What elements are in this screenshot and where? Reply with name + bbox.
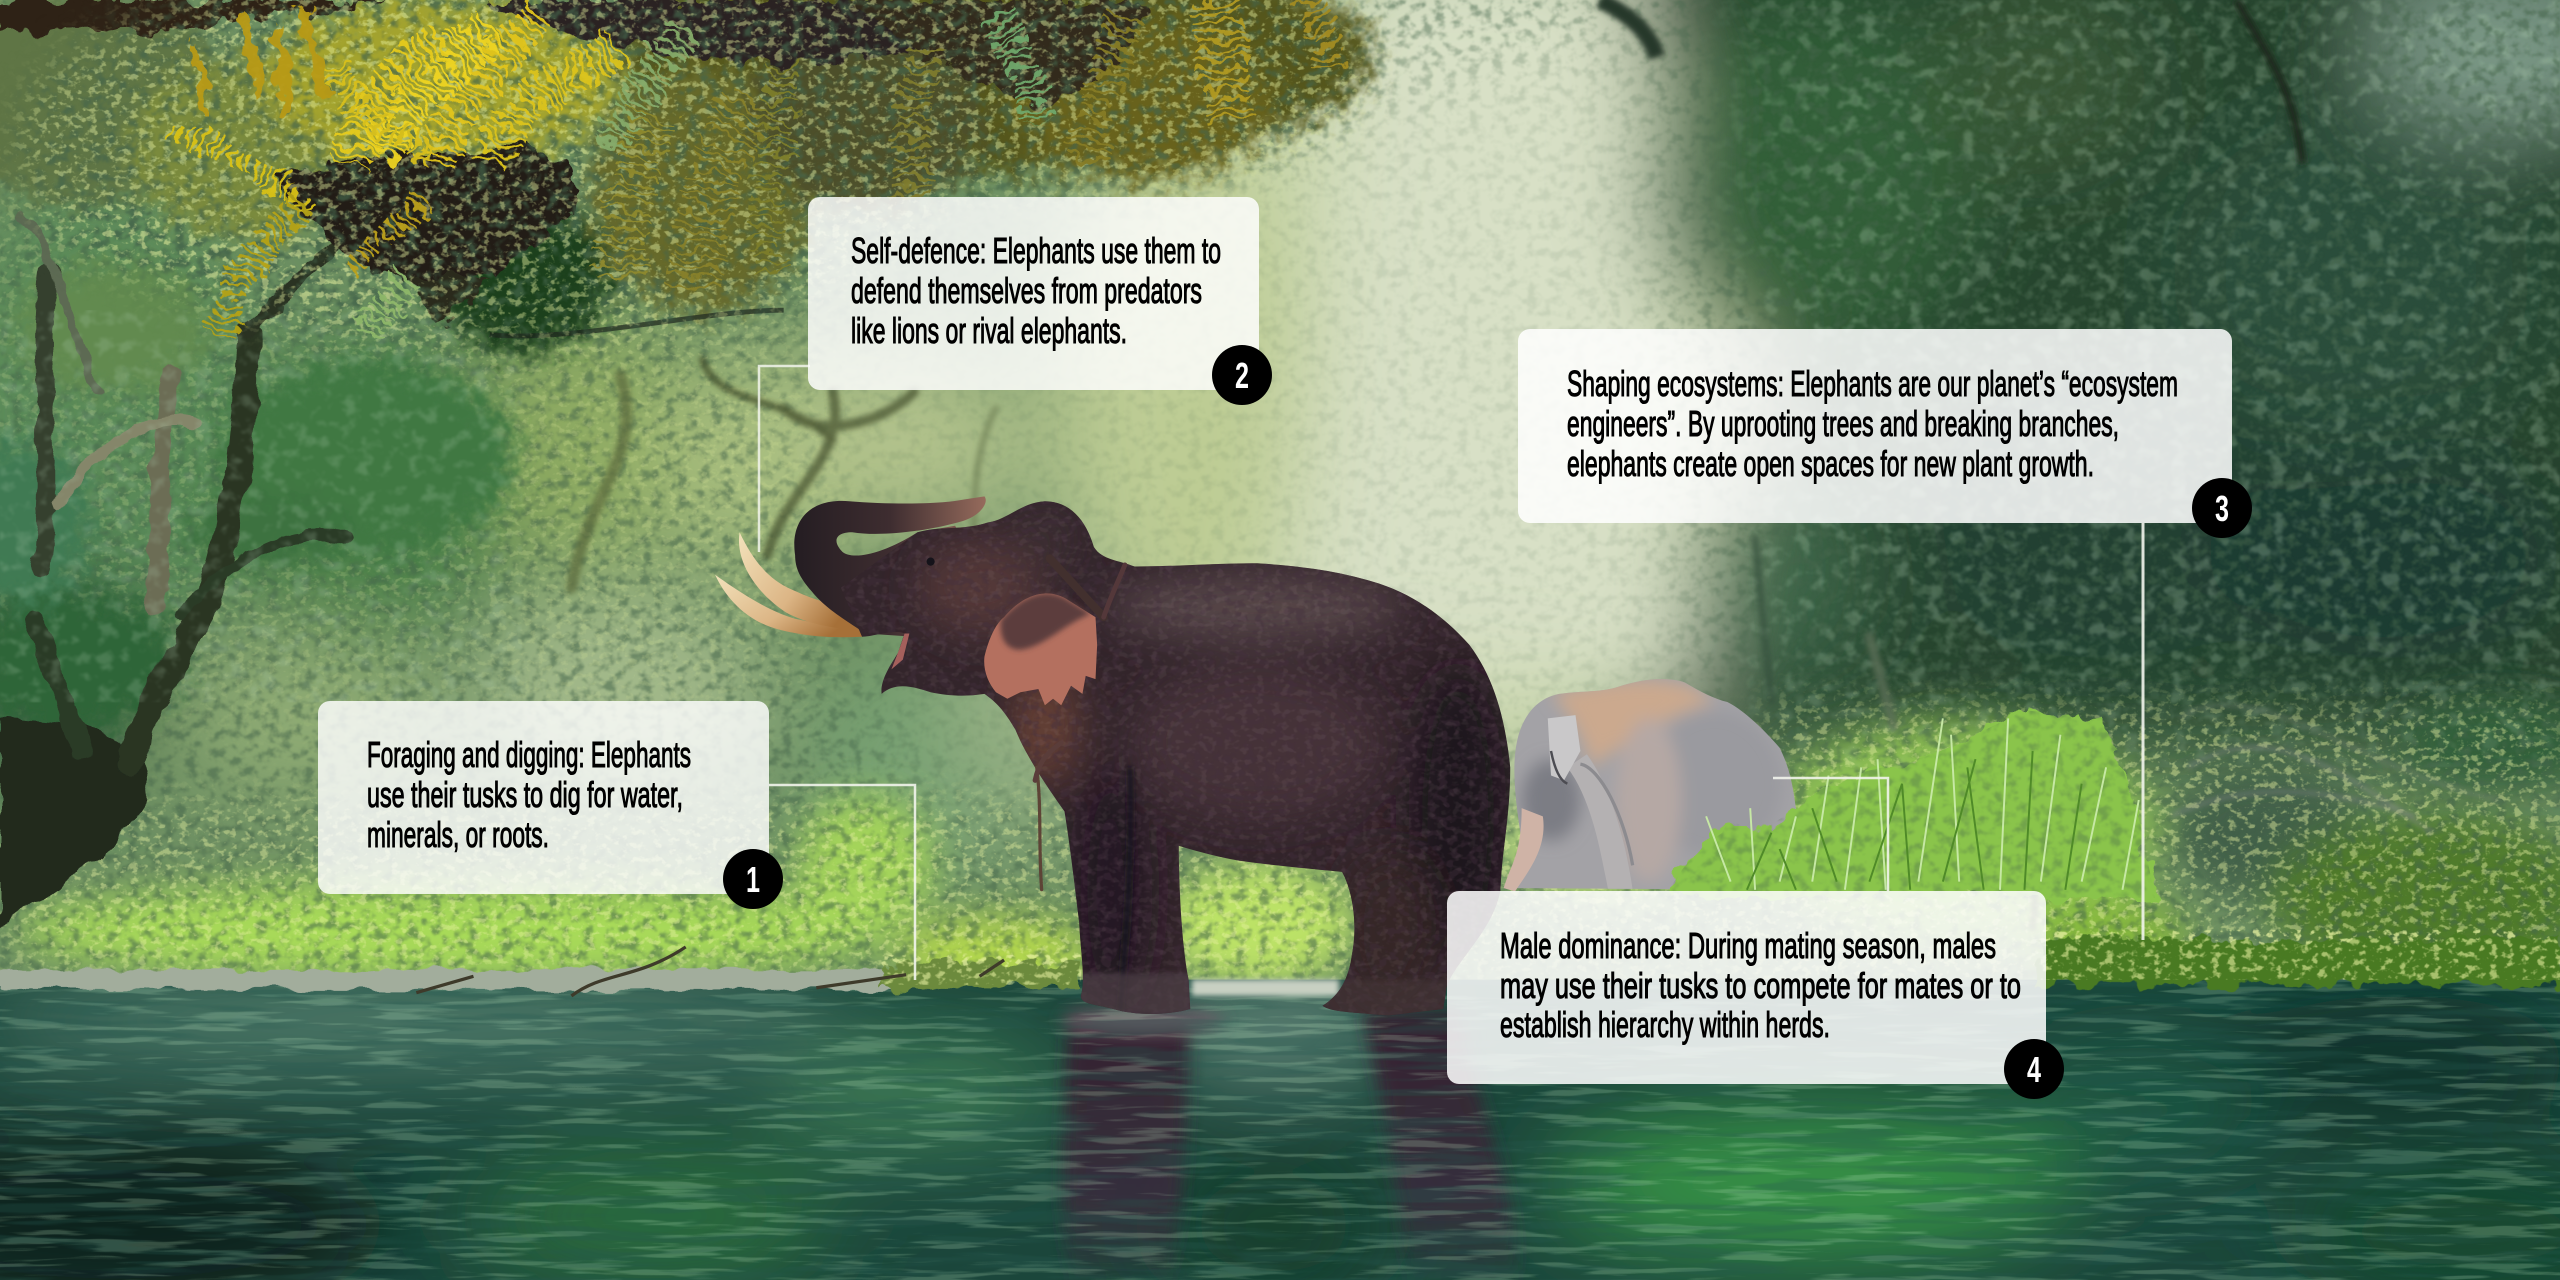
main elephant xyxy=(715,473,1535,1029)
yellow fern fronds xyxy=(171,0,1331,335)
number badge 1: 1 xyxy=(746,859,760,900)
left bush foliage xyxy=(0,261,514,730)
number badge 2 xyxy=(1212,345,1272,405)
leaf dapple over left trees xyxy=(0,310,522,702)
card 2 text: like lions or rival elephants. xyxy=(851,310,1127,351)
elephant reflection xyxy=(1061,1009,1518,1280)
card 4 text: Male dominance: During mating season, males xyxy=(1500,925,1996,966)
elephant body xyxy=(841,501,1510,1016)
card 2 text: defend themselves from predators xyxy=(851,270,1202,311)
callout card 1: foraging and digging xyxy=(318,701,783,909)
number badge 2: 2 xyxy=(1235,355,1249,396)
number badge 4: 4 xyxy=(2027,1049,2041,1090)
elephant shading xyxy=(718,473,1535,1029)
connector line 4 xyxy=(1773,778,1888,891)
card 4 text: establish hierarchy within herds. xyxy=(1500,1004,1830,1045)
connector line 1 xyxy=(769,785,915,980)
card 1 text: use their tusks to dig for water, xyxy=(367,774,683,815)
card 3 text: elephants create open spaces for new plant growth. xyxy=(1567,443,2094,484)
ear xyxy=(984,593,1097,705)
number badge 3 xyxy=(2192,478,2252,538)
card 4 text xyxy=(1500,925,2021,1045)
card 2 text: Self-defence: Elephants use them to xyxy=(851,230,1221,271)
left foreground trees xyxy=(0,212,351,927)
callout card 3: shaping ecosystems xyxy=(1518,329,2252,538)
card 3 text: Shaping ecosystems: Elephants are our planet’s “ecosystem xyxy=(1567,363,2178,404)
number badge 1 xyxy=(723,849,783,909)
connector line 3 xyxy=(2142,523,2144,940)
canopy masses xyxy=(0,0,1404,376)
card 1 text: minerals, or roots. xyxy=(367,814,549,855)
far tusk and near tusk xyxy=(715,532,862,637)
trunk xyxy=(794,496,986,637)
distant tree trunks xyxy=(571,359,1894,727)
background elephant xyxy=(1504,679,1802,891)
right forest details xyxy=(1600,0,2498,931)
foliage dapple texture xyxy=(0,0,2560,980)
callout card 4: male dominance xyxy=(1447,891,2064,1099)
card 1 text: Foraging and digging: Elephants xyxy=(367,734,691,775)
shoreline gravel and plants xyxy=(0,931,2560,996)
grass and meadow band xyxy=(16,700,2560,994)
river water xyxy=(0,976,2560,1280)
number badge 3: 3 xyxy=(2215,488,2229,529)
card 4 text: may use their tusks to compete for mates or to xyxy=(1500,965,2021,1006)
number badge 4 xyxy=(2004,1039,2064,1099)
card 1 text xyxy=(367,734,691,855)
grass in front of background elephant xyxy=(1665,702,2155,898)
card 3 text xyxy=(1567,363,2178,484)
canopy leaf dapple xyxy=(0,0,1404,376)
harness rope xyxy=(1035,558,1125,890)
card 3 text: engineers”. By uprooting trees and breaking branches, xyxy=(1567,403,2119,444)
connector line 2 xyxy=(759,366,810,552)
water ripples xyxy=(0,976,2560,1280)
card 2 text xyxy=(851,230,1221,351)
eye and mouth xyxy=(891,558,935,669)
callout card 2: self-defence xyxy=(808,197,1272,405)
